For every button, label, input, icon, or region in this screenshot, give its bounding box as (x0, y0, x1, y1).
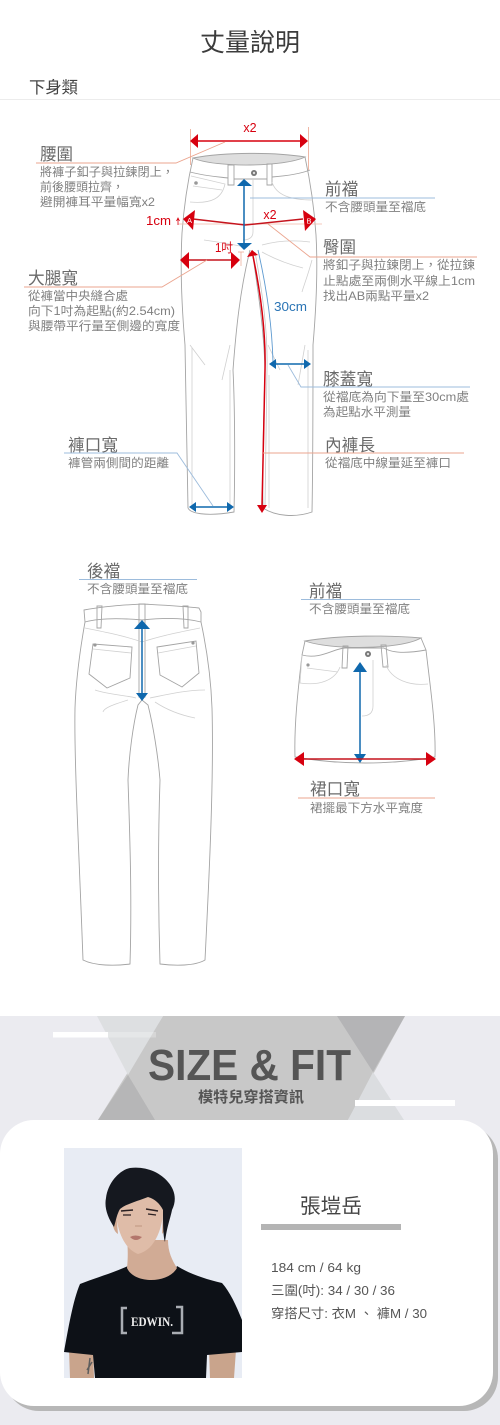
hip measurement arrow A to B: A (187, 216, 192, 225)
model photo (64, 1148, 242, 1378)
eyes, nose and lips (121, 1209, 158, 1211)
trouser outline (181, 153, 317, 515)
hip measurement arrow A to B: x2 (263, 208, 277, 222)
thigh width arrow (180, 241, 244, 269)
card shadow (5, 1125, 498, 1411)
front rise arrow (237, 179, 252, 250)
model measurements: 穿搭尺寸: 衣M 、 褲M / 30 (271, 1306, 427, 1321)
callout: 膝蓋寬: 從襠底為向下量至30cm處 (323, 389, 469, 404)
callout: 大腿寬: 大腿寬 (28, 269, 78, 288)
callout: 臀圍: 止點處至兩側水平線上1cm (323, 273, 475, 288)
callout: 裙口寬 (298, 780, 435, 815)
arms (69, 1350, 236, 1378)
banner heading: SIZE & FIT: SIZE & FIT (148, 1041, 351, 1090)
callout: 前襠 (250, 180, 435, 214)
callout: 大腿寬: 與腰帶平行量至側邊的寬度 (28, 318, 180, 333)
banner: geometric shapes (53, 1016, 455, 1120)
callout: 膝蓋寬: 為起點水平測量 (323, 404, 411, 419)
callout: 大腿寬: 向下1吋為起點(約2.54cm) (28, 303, 175, 318)
hair (105, 1168, 175, 1242)
30cm guide and label: 30cm (274, 299, 307, 314)
shirt logo text: EDWIN. (131, 1315, 173, 1329)
callout: 腰圍: 將褲子釦子與拉鍊閉上， (40, 164, 174, 179)
callout: 腰圍: 前後腰頭拉齊， (40, 179, 124, 194)
callout: 腰圍 (36, 142, 225, 209)
callout: 腰圍: 腰圍 (40, 145, 73, 164)
panel: size and fit background (0, 1016, 500, 1425)
callout: 臀圍 (268, 224, 477, 303)
callout: 臀圍: 找出AB兩點平量x2 (323, 288, 429, 303)
model measurements (271, 1260, 427, 1321)
callout: 裙口寬: 裙擺最下方水平寬度 (310, 800, 423, 815)
tattoo (87, 1358, 92, 1374)
callout: 前襠 skirt: 前襠 (309, 582, 342, 601)
callout: 褲口寬: 褲管兩側間的距離 (68, 455, 169, 470)
callout: 膝蓋寬: 膝蓋寬 (323, 370, 373, 389)
model name: 張塏岳 (300, 1195, 362, 1218)
hip measurement arrow A to B: B (306, 216, 312, 226)
callout: 前襠: 不含腰頭量至襠底 (325, 199, 426, 214)
panel: model card (0, 1120, 493, 1406)
face (115, 1189, 164, 1254)
thigh width arrow: 1吋 (215, 241, 233, 255)
shirt logo brackets (122, 1307, 182, 1333)
callout: 腰圍: 避開褲耳平量幅寬x2 (40, 194, 155, 209)
callout: 後襠: 後襠 (87, 562, 120, 581)
neck (127, 1240, 177, 1280)
callout: 內褲長: 從襠底中線量延至褲口 (325, 455, 451, 470)
diagram: back of trousers (75, 604, 212, 965)
callout: 臀圍: 臀圍 (323, 238, 356, 257)
callout: 裙口寬: 裙口寬 (310, 780, 360, 799)
30cm guide and label (258, 250, 307, 362)
callout: 內褲長: 內褲長 (325, 436, 375, 455)
callout: 大腿寬 (24, 260, 207, 333)
hip measurement arrow A to B (146, 208, 322, 231)
title: 丈量說明 (200, 29, 300, 57)
hem width arrow (189, 502, 234, 512)
model measurements: 184 cm / 64 kg (271, 1260, 361, 1275)
callout: 後襠: 不含腰頭量至襠底 (87, 581, 188, 596)
callout: 後襠 (79, 562, 197, 596)
knee width arrow (269, 359, 311, 369)
callout: 褲口寬 (64, 436, 213, 506)
waist measurement arrow (190, 121, 308, 170)
callout: 前襠 skirt (301, 582, 420, 616)
waist measurement arrow: x2 (243, 121, 257, 135)
name divider bar (261, 1224, 401, 1230)
model measurements: 三圍(吋): 34 / 30 / 36 (271, 1283, 395, 1298)
hip measurement arrow A to B: 1cm (146, 213, 171, 228)
t-shirt (64, 1266, 242, 1378)
ears (112, 1212, 167, 1234)
callout: 臀圍: 將釦子與拉鍊閉上，從拉鍊 (323, 257, 475, 272)
callout: 膝蓋寬 (288, 365, 470, 419)
banner subtitle: 模特兒穿搭資訊 (198, 1088, 304, 1106)
section heading: 下身類: 下身類 (29, 78, 78, 97)
diagram: skirt (294, 636, 436, 766)
diagram: front of trousers (146, 121, 322, 515)
callout: 褲口寬: 褲口寬 (68, 436, 118, 455)
callout: 前襠 skirt: 不含腰頭量至襠底 (309, 601, 410, 616)
callout: 前襠: 前襠 (325, 180, 358, 199)
callout: 大腿寬: 從褲當中央縫合處 (28, 288, 128, 303)
callout: 內褲長 (263, 436, 464, 470)
inseam arrow (247, 250, 267, 513)
